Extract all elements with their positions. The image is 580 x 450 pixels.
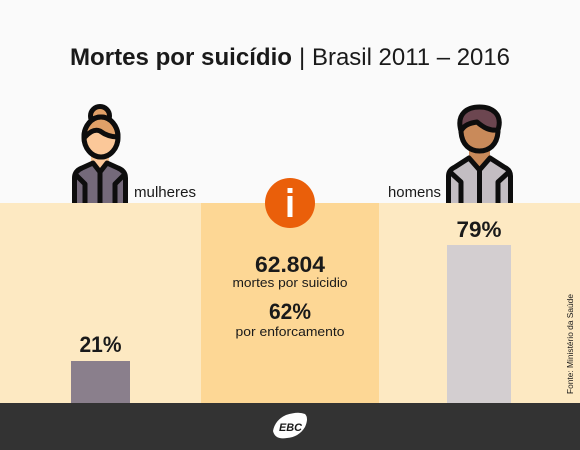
bar chart: women <box>71 332 130 403</box>
logo: EBC <box>273 413 307 438</box>
icon: info circle <box>265 178 315 228</box>
panel: central highlight <box>201 203 379 403</box>
stat: hanging share <box>236 299 344 339</box>
stat: total deaths <box>232 252 348 290</box>
stat: hanging share: por enforcamento <box>236 324 344 339</box>
logo: EBC: EBC <box>279 422 303 434</box>
source note: Fonte: Ministério da Saúde <box>565 294 575 394</box>
footer bar <box>0 403 580 450</box>
bar chart: women: 21% <box>80 332 122 357</box>
label: homens: homens <box>388 184 441 201</box>
stat: total deaths: 62.804 <box>255 252 326 277</box>
bar chart: men <box>447 217 511 403</box>
title: Brasil 2011 – 2016 <box>312 44 510 71</box>
label: mulheres: mulheres <box>134 184 196 201</box>
title: | <box>299 44 305 71</box>
title: Mortes por suicídio <box>70 44 292 71</box>
stat: hanging share: 62% <box>269 299 311 324</box>
bar chart: men: 79% <box>456 217 502 242</box>
stat: total deaths: mortes por suicidio <box>232 275 348 290</box>
icon: woman <box>74 106 126 210</box>
title <box>70 44 510 71</box>
icon: man <box>448 107 510 210</box>
panel: beige background band <box>0 203 580 403</box>
